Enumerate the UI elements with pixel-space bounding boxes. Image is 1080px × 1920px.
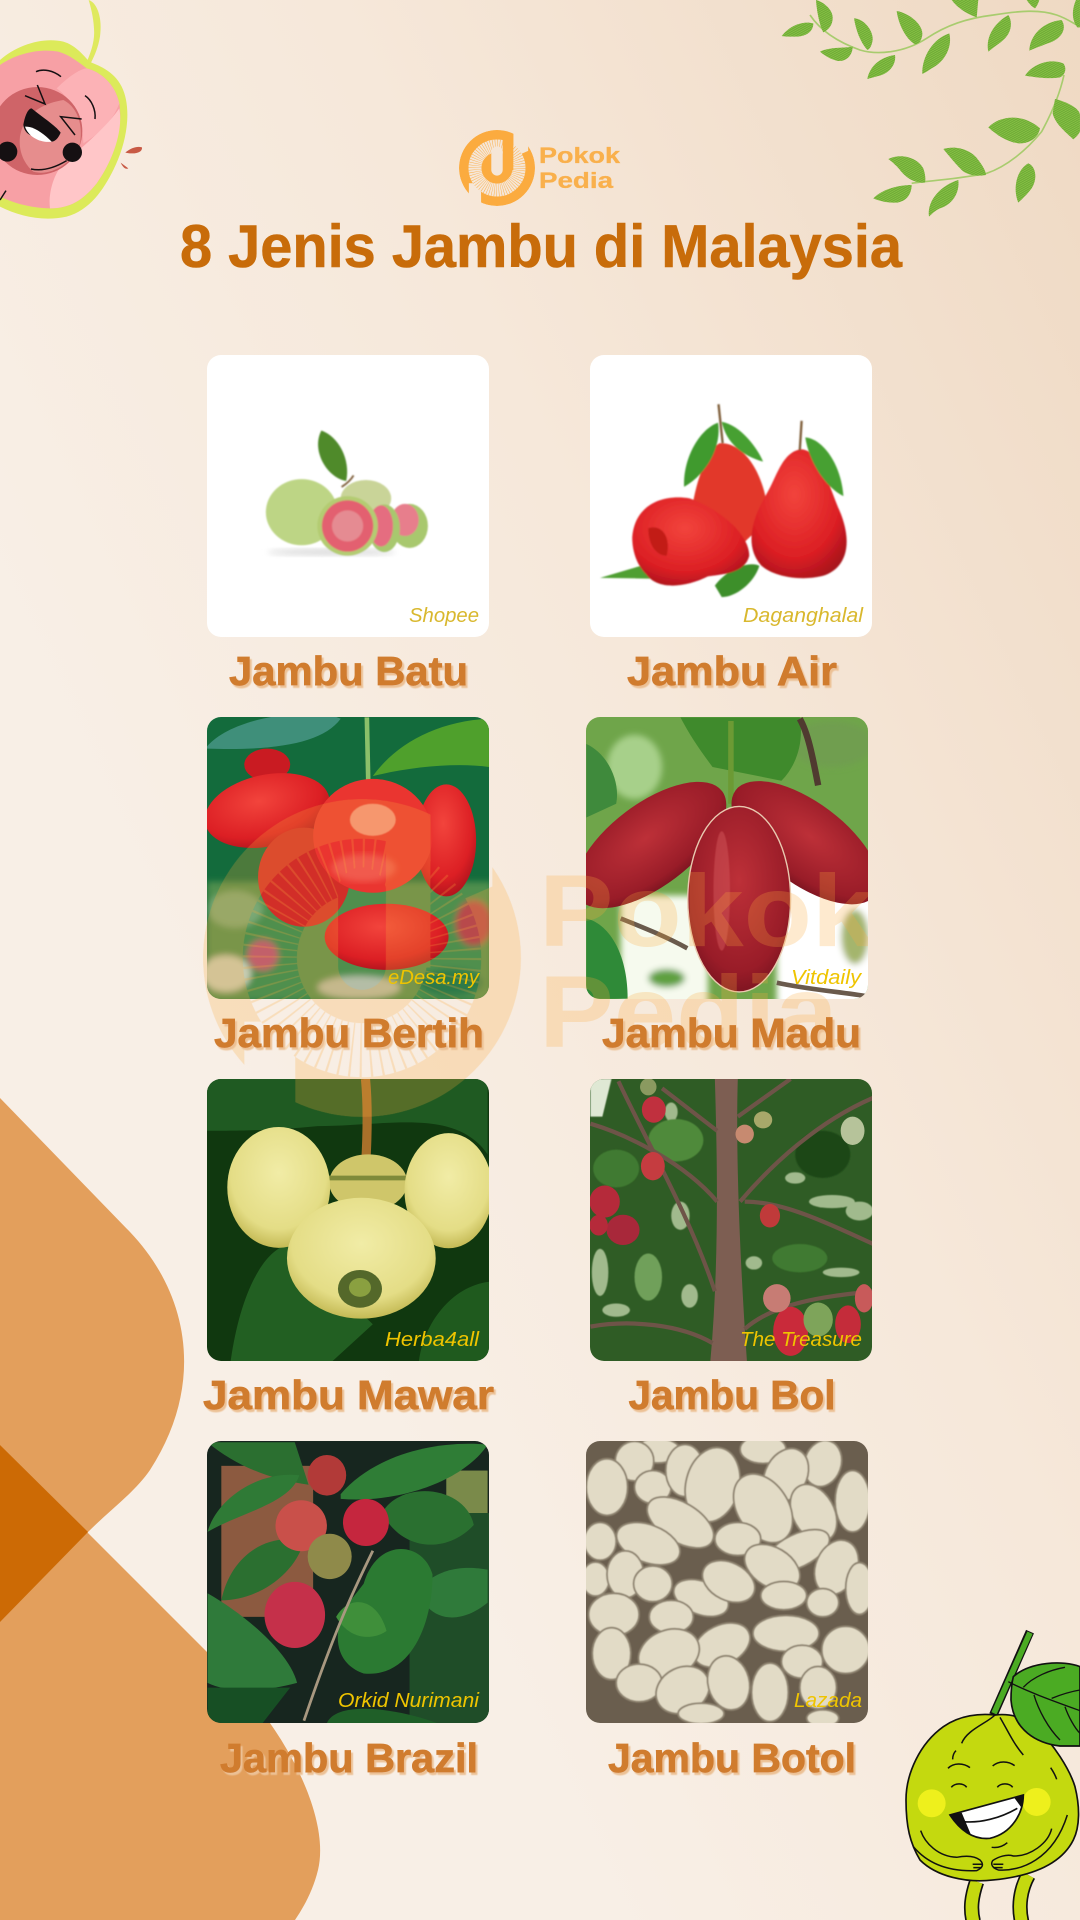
label: Jambu Bol: Jambu Bol [628,1372,836,1418]
source: Herba4all: Herba4all [385,1329,480,1351]
photo card: Jambu Madu [586,717,868,999]
label: Jambu Madu: Jambu Madu [602,1010,861,1056]
label: Jambu Brazil: Jambu Brazil [220,1735,478,1781]
photo card: Jambu Batu [207,355,489,637]
photo card: Jambu Bol [590,1078,873,1362]
photo card: Jambu Bertih [198,714,492,1001]
label: Jambu Batu: Jambu Batu [229,648,468,694]
label: Jambu Bertih: Jambu Bertih [214,1010,484,1056]
title: 8 Jenis Jambu di Malaysia [180,213,903,280]
cartoon: green guava bottom right [906,1632,1080,1920]
photo card: Jambu Brazil [207,1441,492,1725]
logo: Pokok Pedia: Pedia [539,168,614,193]
logo: Pokok Pedia [459,130,621,206]
watermark logo [203,799,874,1117]
source: Lazada: Lazada [794,1690,862,1712]
watermark logo: Pedia [539,955,839,1069]
leafy vines top right [782,0,1080,217]
decorative orange rounded shapes [0,1098,320,1920]
source: Orkid Nurimani: Orkid Nurimani [338,1690,480,1712]
source: eDesa.my: eDesa.my [388,967,480,989]
photo card: Jambu Botol [582,1435,873,1727]
source: The Treasure: The Treasure [740,1329,862,1351]
photo card: Jambu Mawar [207,1079,493,1362]
watermark logo: Pokok [539,854,874,968]
photo card: Jambu Air [590,355,872,637]
label: Jambu Air: Jambu Air [627,648,837,694]
source: Vitdaily: Vitdaily [791,967,862,989]
cartoon: pink guava top left [0,0,142,219]
logo: Pokok Pedia: Pokok [539,143,621,168]
label: Jambu Mawar: Jambu Mawar [203,1372,494,1418]
source: Shopee: Shopee [409,605,479,627]
label: Jambu Botol: Jambu Botol [608,1735,856,1781]
source: Daganghalal: Daganghalal [743,605,864,627]
